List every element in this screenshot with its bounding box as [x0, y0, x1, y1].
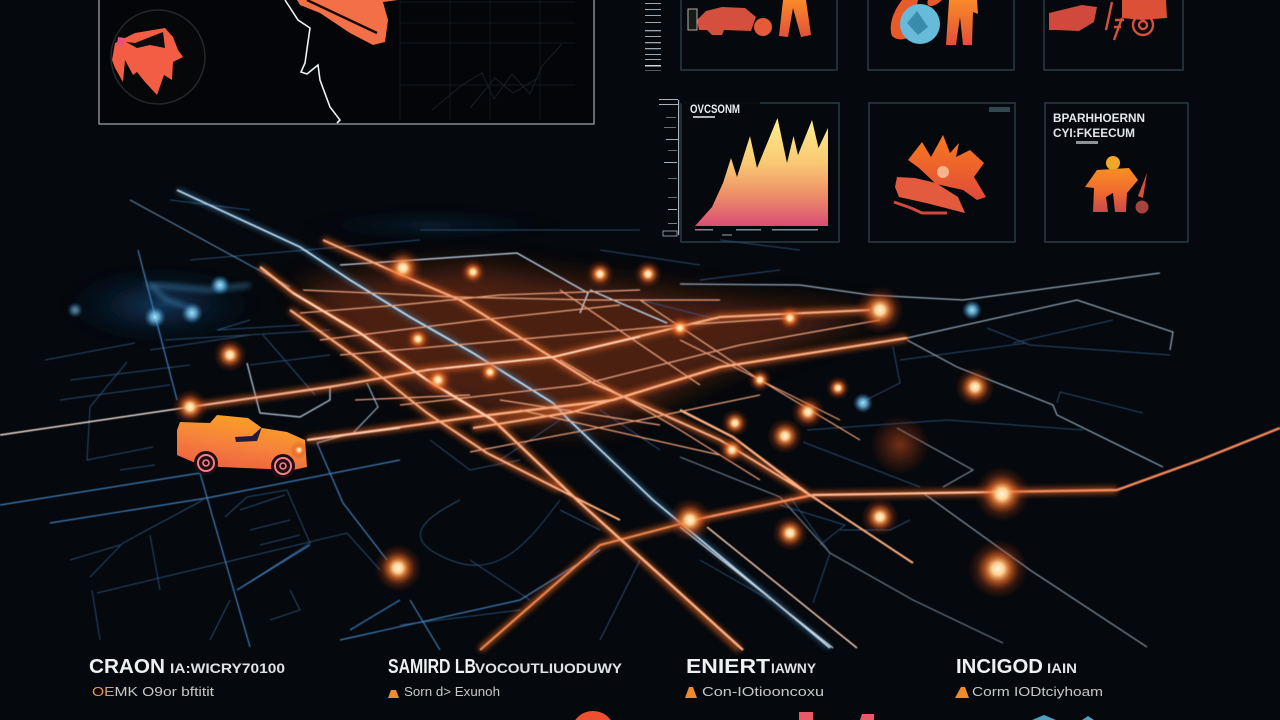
stat block: injured: [388, 656, 623, 699]
bright blue-white road: [130, 190, 830, 648]
icon: blue ball: [900, 4, 940, 44]
blue roads: [0, 250, 600, 650]
icon: person: [779, 0, 811, 37]
icon: burst: [908, 135, 986, 200]
panel heading: BPARHHOERNN: [1053, 111, 1145, 125]
panel: area chart: [681, 102, 839, 242]
chart heading: OVCSONM: [690, 102, 740, 116]
stat block: enient: ENIERT: [686, 656, 770, 678]
stat block: injured: Sorn d> Exunoh: [404, 684, 500, 699]
icon: warning triangle: [388, 690, 399, 698]
stat block: incident: [955, 656, 1103, 699]
icon: orange car on map: [177, 415, 308, 478]
stat block: injured: SAMIRD LB: [388, 656, 476, 678]
stat block: enient: [685, 656, 824, 699]
icon: car: [697, 7, 756, 35]
stat block: enient: IAWNY: [771, 660, 817, 676]
icon: warning triangle: [955, 687, 969, 698]
axis scale: [659, 99, 679, 236]
glow under orange roads: [190, 240, 1117, 650]
faint street network: [45, 200, 1170, 640]
incident markers: [67, 248, 1030, 599]
panel: department figure: CYI:FKEECUM: [1053, 126, 1135, 140]
stat block: crash: [89, 656, 285, 699]
stat block: incident: IAIN: [1047, 660, 1077, 676]
white-hot roads: [0, 293, 1002, 648]
inset circle map: [111, 10, 205, 104]
stat block: injured: VOCOUTLIUODUWY: [475, 660, 623, 676]
blue blobs: [147, 283, 250, 307]
icon: flame: [891, 0, 942, 39]
stat block: enient: Con-IOtiooncoxu: [702, 684, 824, 699]
area chart: [695, 118, 828, 226]
panel: fire hazard: [868, 0, 1014, 70]
orange roads: [190, 240, 1280, 650]
stat block: crash: CRAON: [89, 656, 165, 678]
map region: orange burn area: [297, 0, 398, 45]
stat block: incident: INCIGOD: [956, 656, 1043, 678]
stat block: crash: IA:WICRY70100: [170, 660, 285, 676]
thin orange cross streets: [300, 290, 880, 480]
icon: rock debris: [895, 177, 965, 213]
icon: warning triangle: [685, 687, 697, 698]
panel: car incident: [681, 0, 837, 70]
map grid lines: [400, 0, 575, 120]
panel: vehicle damage: [1044, 0, 1183, 70]
map network: [0, 190, 1280, 650]
stat block: incident: Corm IODtciyhoam: [972, 684, 1103, 699]
panel: department figure: [1045, 103, 1188, 242]
grey-white right-side roads: [680, 273, 1173, 647]
panel: explosion: [869, 103, 1015, 242]
coastline: [285, 0, 340, 123]
stat block: crash: OE MK O9or bftitit: [92, 684, 214, 699]
blue map haze: [60, 205, 560, 347]
cropped bottom icons: [571, 711, 1094, 720]
chart axis: [695, 229, 818, 236]
icon: person with tool: [1085, 156, 1148, 214]
side tick scale: [645, 3, 661, 71]
icon: person: [946, 0, 978, 45]
panel: regional map: [99, 0, 594, 124]
warm glow behind the road bundle: [295, 265, 880, 425]
icon: wrecked car: [1049, 5, 1097, 31]
